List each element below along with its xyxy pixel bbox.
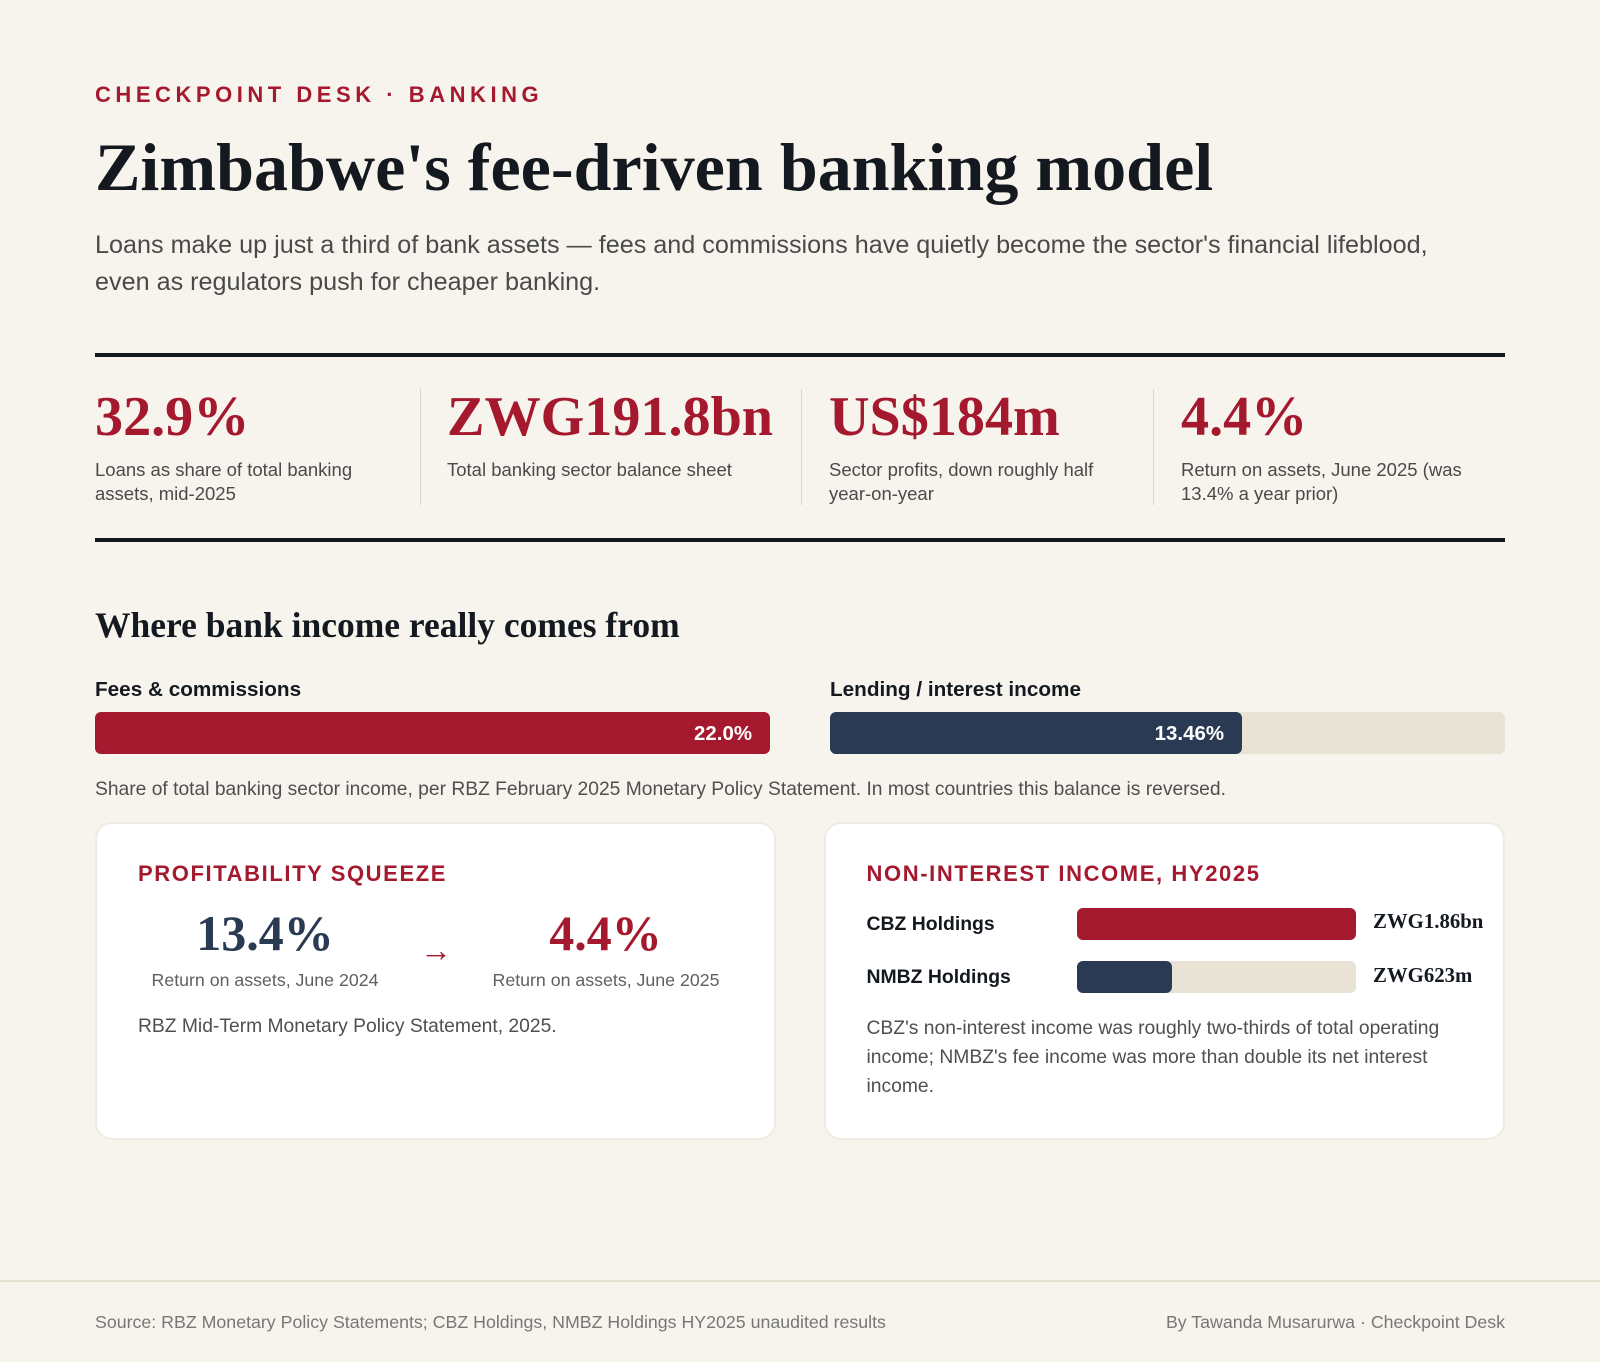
bar: lending track — [830, 712, 1505, 754]
stat description: sector profits: Sector profits, down roughly half — [829, 458, 1093, 480]
figure: 2025 return on assets: 4.4% — [549, 905, 662, 961]
bar: lending fill — [830, 712, 1242, 754]
title: Zimbabwe's fee-driven banking model — [95, 128, 1213, 204]
panel heading: profitability squeeze: PROFITABILITY SQUEEZE — [138, 860, 447, 886]
stat: sector profits: US$184m — [829, 386, 1060, 448]
subtitle — [95, 231, 1428, 296]
footer source: Source: RBZ Monetary Policy Statements; CBZ Holdings, NMBZ Holdings HY2025 unaudited results — [95, 1312, 886, 1332]
stat description: loans share: assets, mid-2025 — [95, 482, 236, 504]
label: lending: Lending / interest income — [830, 678, 1081, 701]
bar: CBZ — [1077, 908, 1356, 940]
subtitle: even as regulators push for cheaper banking. — [95, 268, 600, 296]
value: NMBZ: ZWG623m — [1373, 964, 1472, 987]
stat: loans share: 32.9% — [95, 386, 249, 448]
commentary — [866, 1018, 1439, 1097]
value: CBZ: ZWG1.86bn — [1373, 910, 1483, 933]
stats row — [95, 386, 1462, 505]
bar value: fees: 22.0% — [694, 722, 752, 744]
bar: NMBZ fill — [1077, 961, 1172, 993]
label: fees: Fees & commissions — [95, 678, 301, 701]
stat description: loans share — [95, 458, 352, 504]
bar: NMBZ track — [1077, 961, 1356, 993]
stat description: loans share: Loans as share of total banking — [95, 458, 352, 480]
panel: profitability squeeze — [95, 822, 776, 1140]
commentary: CBZ's non-interest income was roughly two-thirds of total operating — [866, 1018, 1439, 1039]
eyebrow: CHECKPOINT DESK · BANKING — [95, 82, 543, 107]
subtitle: Loans make up just a third of bank assets — fees and commissions have quietly become the sector's financial lifeblood, — [95, 231, 1428, 259]
section heading: Where bank income really comes from — [95, 605, 680, 645]
stat description: return on assets: Return on assets, June 2025 (was — [1181, 458, 1462, 480]
figure: 2024 return on assets: 13.4% — [196, 905, 334, 961]
caption: June 2024: Return on assets, June 2024 — [152, 970, 378, 990]
bar note: Share of total banking sector income, per RBZ February 2025 Monetary Policy Statement. In most countries this balance is reversed. — [95, 779, 1226, 800]
footer byline: By Tawanda Musarurwa · Checkpoint Desk — [1166, 1312, 1505, 1332]
caption: June 2025: Return on assets, June 2025 — [493, 970, 719, 990]
label: NMBZ: NMBZ Holdings — [866, 966, 1011, 988]
bar: fees and commissions — [95, 712, 770, 754]
stat description: balance sheet: Total banking sector balance sheet — [447, 458, 732, 480]
arrow: → — [420, 932, 452, 968]
stat description: sector profits: year-on-year — [829, 482, 934, 504]
bar value: lending: 13.46% — [1155, 722, 1224, 744]
stat description: return on assets: 13.4% a year prior) — [1181, 482, 1338, 504]
stat description: return on assets — [1181, 458, 1462, 504]
commentary: income. — [866, 1076, 934, 1097]
panel: non-interest income — [824, 822, 1505, 1140]
panel heading: non-interest income: NON-INTEREST INCOME, HY2025 — [866, 860, 1261, 886]
stat: return on assets: 4.4% — [1181, 386, 1307, 448]
source note: RBZ Mid-Term Monetary Policy Statement, 2025. — [138, 1016, 557, 1037]
commentary: income; NMBZ's fee income was more than double its net interest — [866, 1047, 1427, 1068]
stat description: sector profits — [829, 458, 1094, 504]
stat: balance sheet: ZWG191.8bn — [447, 386, 773, 448]
label: CBZ: CBZ Holdings — [866, 913, 995, 935]
